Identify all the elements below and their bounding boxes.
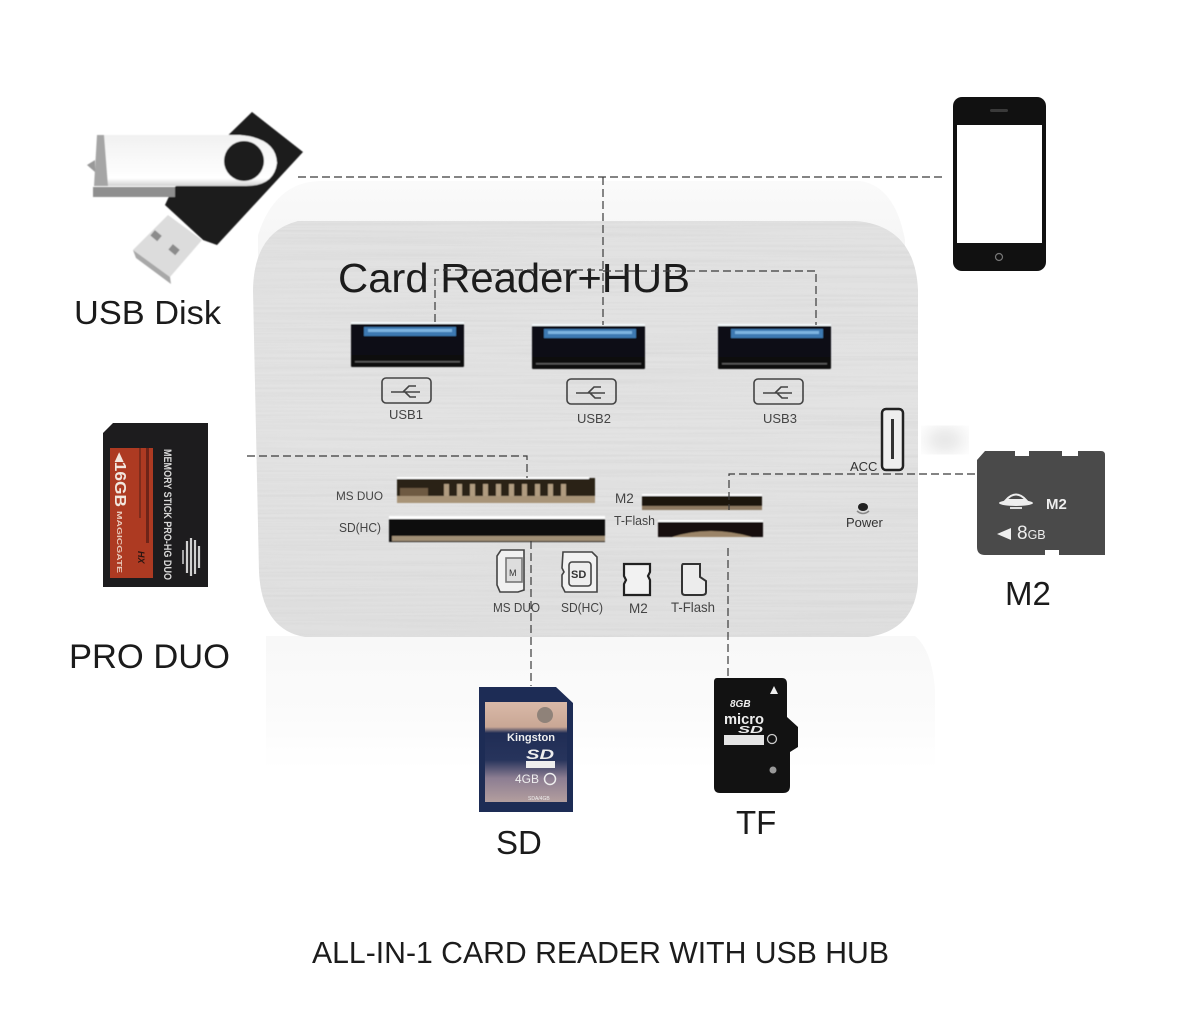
label: USB1: USB1 (389, 407, 423, 422)
label: PRO DUO: PRO DUO (69, 638, 230, 676)
icon: PRO DUO memory stick: HX (136, 551, 146, 564)
label: M2: M2 (1005, 575, 1051, 612)
hub top surface (258, 181, 905, 300)
label: T-Flash slot: T-Flash (614, 513, 655, 528)
blurred smudge right of hub (925, 428, 965, 452)
icon: SD card (479, 687, 573, 812)
label: MS DUO icon: MS DUO (493, 601, 540, 615)
label: SD: SD (496, 824, 542, 861)
T-Flash slot (658, 520, 763, 537)
dashed connector lines (247, 177, 975, 686)
Memory Stick logo (183, 538, 199, 576)
label: M2 slot: M2 (615, 491, 634, 506)
label: T-Flash icon: T-Flash (671, 599, 715, 615)
stick text: ◂16GB (111, 452, 128, 507)
icon: SD card: 4GB (515, 772, 539, 786)
label: Power: Power (846, 515, 884, 530)
icon: MS DUO card outline (497, 550, 524, 592)
label: MS DUO slot: MS DUO (336, 489, 383, 503)
label: TF: TF (736, 804, 776, 841)
black body (165, 112, 303, 245)
icon: USB symbol 2 (567, 379, 616, 404)
icon: TF micro SD card: micro (724, 711, 764, 728)
label: USB3: USB3 (763, 411, 797, 426)
device: card reader hub (253, 181, 918, 637)
label: USB2: USB2 (577, 411, 611, 426)
icon: SD card outline (562, 552, 597, 592)
MS DUO slot (397, 477, 595, 503)
icon: PRO DUO memory stick: MAGICGATE (115, 511, 124, 573)
icon: M2 memory card (977, 451, 1105, 555)
icon: M2 card outline (624, 564, 650, 595)
icon: SD card: Kingston (507, 732, 555, 744)
icon: TF micro SD card: SD (738, 725, 763, 736)
USB port 3 (718, 324, 831, 369)
icon: MS DUO card outline: M (509, 568, 516, 578)
label: USB Disk: USB Disk (74, 294, 222, 331)
label: SD(HC) slot: SD(HC) (339, 520, 381, 535)
hub title: Card Reader+HUB (338, 255, 690, 301)
brushed metal texture (253, 221, 918, 637)
hub front face (253, 221, 918, 637)
icon: TF micro SD card: 8GB (730, 699, 751, 710)
icon: PRO DUO memory stick (103, 423, 208, 587)
icon: SD card outline: SD (571, 569, 586, 581)
USB port 1 (351, 322, 464, 367)
icon: T-Flash card outline (682, 564, 706, 595)
icon: SD card: SDA/4GB (528, 796, 550, 802)
icon: USB disk (87, 112, 303, 284)
label: ACC: ACC (850, 459, 877, 474)
red label (110, 448, 153, 578)
power LED (857, 503, 869, 514)
swivel pivot (224, 141, 264, 181)
caption: ALL-IN-1 CARD READER WITH USB HUB (312, 935, 889, 970)
icon: M2 memory card: M2 (1046, 496, 1067, 513)
icon: smartphone (953, 97, 1046, 271)
icon: TF micro SD card (714, 678, 798, 793)
icon: USB symbol 3 (754, 379, 803, 404)
hub reflection (266, 636, 935, 770)
silver swivel (96, 135, 277, 186)
icon: PRO DUO memory stick: MEMORY STICK PRO-HG DUO (161, 449, 173, 580)
M2 slot (642, 494, 762, 510)
label: M2 icon: M2 (629, 601, 648, 616)
USB port 2 (532, 324, 645, 369)
icon: M2 memory card: 8GB (1017, 523, 1046, 544)
icon: SD card: SD (526, 746, 554, 762)
USB plug (133, 215, 202, 277)
icon: USB symbol 1 (382, 378, 431, 403)
label: SD(HC) icon: SD(HC) (561, 600, 603, 615)
SD slot (389, 516, 605, 542)
ACC port (882, 409, 903, 470)
